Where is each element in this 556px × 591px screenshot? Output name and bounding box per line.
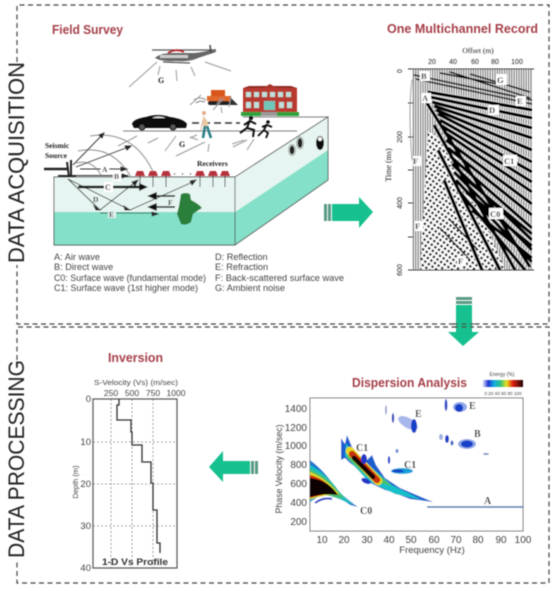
wave labels on dispersion bbox=[356, 401, 492, 517]
legend: left column: C0: Surface wave (fundamental mode) bbox=[54, 273, 206, 283]
legend: energy colour scale: Energy (%) bbox=[489, 372, 515, 378]
title: inversion: Inversion bbox=[108, 351, 163, 365]
y tick labels: 400 bbox=[290, 498, 307, 509]
wave labels: B bbox=[114, 172, 119, 181]
C1 higher mode energy bbox=[341, 435, 433, 502]
velocity step line bbox=[117, 399, 160, 553]
wave labels on record bbox=[413, 71, 526, 266]
y tick labels: 20 bbox=[80, 479, 91, 490]
ray arrows bbox=[73, 133, 131, 178]
noise lines: ground bbox=[118, 95, 254, 156]
legend: left column: C1: Surface wave (1st higher mode) bbox=[54, 283, 198, 293]
icon: school building bbox=[241, 84, 299, 116]
wave fronts bbox=[76, 135, 155, 177]
title: field survey: Field Survey bbox=[52, 23, 123, 37]
y tick labels bbox=[80, 394, 91, 574]
chart label: 1-D Vs Profile bbox=[102, 557, 168, 568]
wave labels: A bbox=[102, 165, 108, 174]
x tick labels: 250 bbox=[104, 388, 118, 398]
y tick labels: 1000 bbox=[285, 441, 307, 452]
wave labels on dispersion: A bbox=[484, 496, 492, 507]
road centre line bbox=[192, 122, 240, 124]
arrow: left bbox=[209, 451, 258, 482]
time tick labels bbox=[397, 69, 404, 276]
heading: data processing: DATA PROCESSING bbox=[4, 360, 29, 558]
legend: energy colour scale: 0 20 40 60 80 100 bbox=[484, 391, 522, 396]
x tick labels: 80 bbox=[472, 535, 484, 546]
wave labels on dispersion: C1 bbox=[404, 460, 416, 471]
time tick labels: 0 bbox=[397, 69, 404, 73]
wave labels on record: B bbox=[421, 71, 427, 81]
y tick labels: 40 bbox=[80, 563, 91, 574]
arrow: surface wave C bbox=[78, 183, 148, 191]
legend: energy colour scale bbox=[482, 372, 523, 396]
y tick labels: 1400 bbox=[285, 404, 307, 415]
arrow: right bbox=[324, 197, 373, 228]
legend: right column: G: Ambient noise bbox=[215, 283, 285, 293]
x tick labels bbox=[316, 535, 532, 546]
E energy patches bbox=[385, 399, 467, 433]
x tick labels: 40 bbox=[383, 535, 395, 546]
axis title: time: Time (ms) bbox=[384, 148, 393, 182]
axis title: offset: Offset (m) bbox=[462, 46, 494, 55]
C1 second patch bbox=[388, 449, 413, 474]
text: seismic source: Source bbox=[45, 151, 68, 160]
wave labels on dispersion: C0 bbox=[360, 506, 372, 517]
offset tick labels: 40 bbox=[449, 59, 457, 66]
wave labels on dispersion: E bbox=[469, 401, 476, 412]
x axis title: S-Velocity (Vs) (m/sec) bbox=[94, 378, 179, 387]
icon: bulldozer bbox=[194, 90, 238, 105]
text: seismic source: Seismic bbox=[45, 141, 70, 150]
x tick labels: 60 bbox=[428, 535, 440, 546]
panel: field survey diagram bbox=[44, 45, 328, 245]
wave labels bbox=[93, 164, 173, 219]
wave labels on record: G bbox=[497, 75, 504, 85]
A air wave energy bbox=[427, 506, 523, 508]
wave labels on record: F bbox=[413, 156, 418, 166]
divider dashes over arrow bbox=[453, 324, 474, 327]
frame: data acquisition bbox=[17, 5, 549, 324]
x tick labels: 1000 bbox=[167, 388, 186, 398]
legend: right column: D: Reflection bbox=[215, 252, 268, 262]
y tick labels: 1200 bbox=[285, 423, 307, 434]
icon: seismic source hammer bbox=[44, 160, 76, 177]
x tick labels: 50 bbox=[405, 535, 417, 546]
time tick labels: 400 bbox=[397, 197, 404, 209]
seismogram wiggle traces bbox=[408, 69, 534, 270]
wave labels on record: D bbox=[489, 105, 495, 115]
C0 fundamental mode energy bbox=[310, 460, 358, 507]
legend: right column bbox=[215, 252, 344, 293]
chart: multichannel seismic record bbox=[384, 46, 534, 276]
noise lines: helicopter bbox=[129, 62, 231, 87]
icon: runners bbox=[240, 116, 272, 138]
x tick labels bbox=[104, 388, 186, 398]
B energy patches bbox=[439, 434, 489, 455]
y tick labels bbox=[285, 404, 307, 528]
legend: left column: A: Air wave bbox=[54, 252, 100, 262]
wave labels on record: F bbox=[415, 221, 420, 231]
wave labels on dispersion: B bbox=[474, 429, 481, 440]
legend: left column bbox=[54, 252, 206, 293]
offset tick labels: 20 bbox=[428, 59, 436, 66]
offset tick labels: 100 bbox=[511, 59, 523, 66]
wave labels on record: C0 bbox=[490, 209, 500, 219]
wave labels on record: E bbox=[517, 96, 523, 106]
icon: helicopter bbox=[152, 45, 216, 63]
title: dispersion analysis: Dispersion Analysis bbox=[352, 376, 467, 390]
icon: green inclusion bbox=[177, 193, 202, 225]
frame: data processing bbox=[17, 327, 549, 583]
arrow: down bbox=[448, 297, 479, 346]
title: one multichannel record: One Multichannel Record bbox=[387, 22, 538, 36]
wave labels: D bbox=[93, 195, 99, 204]
block model bbox=[54, 117, 328, 245]
icon: walking person bbox=[201, 111, 211, 138]
y axis title: Depth (m) bbox=[71, 465, 80, 499]
ray paths: reflection and refraction bbox=[68, 179, 196, 216]
wave labels on dispersion: E bbox=[415, 409, 422, 420]
wave labels: E bbox=[109, 210, 114, 219]
time tick labels: 600 bbox=[397, 264, 404, 276]
y tick labels: 0 bbox=[86, 394, 91, 405]
y axis title: Phase Velocity (m/sec) bbox=[274, 424, 285, 514]
y tick labels: 30 bbox=[80, 521, 91, 532]
plot frame and grid bbox=[93, 399, 177, 568]
x tick labels: 70 bbox=[450, 535, 462, 546]
arrows: back-scattered F bbox=[149, 193, 175, 210]
y tick labels: 200 bbox=[290, 517, 307, 528]
label: G top: G bbox=[158, 76, 164, 85]
x axis title: Frequency (Hz) bbox=[399, 545, 465, 556]
chart: dispersion image bbox=[274, 398, 532, 556]
legend: right column: F: Back-scattered surface wave bbox=[215, 273, 344, 283]
heading: data acquisition: DATA ACQUISITION bbox=[4, 62, 29, 263]
legend: left column: B: Direct wave bbox=[54, 262, 113, 272]
y tick labels: 10 bbox=[80, 437, 91, 448]
offset tick labels: 80 bbox=[491, 59, 499, 66]
x tick labels: 30 bbox=[361, 535, 373, 546]
offset tick labels bbox=[428, 59, 523, 66]
wave labels on record: C1 bbox=[504, 156, 514, 166]
receivers bbox=[135, 171, 230, 187]
plot frame bbox=[310, 398, 523, 531]
wave labels: C bbox=[105, 183, 111, 192]
x tick labels: 90 bbox=[495, 535, 507, 546]
y tick labels: 600 bbox=[290, 479, 307, 490]
x tick labels: 20 bbox=[338, 535, 350, 546]
x tick labels: 100 bbox=[515, 535, 532, 546]
x tick labels: 750 bbox=[146, 388, 160, 398]
offset tick labels: 60 bbox=[471, 59, 479, 66]
chart: 1-D Vs profile bbox=[71, 378, 186, 574]
x tick labels: 10 bbox=[316, 535, 328, 546]
time tick labels: 200 bbox=[397, 131, 404, 143]
wave labels on dispersion: C1 bbox=[356, 443, 368, 454]
wave labels on record: F bbox=[458, 256, 463, 266]
y tick labels: 800 bbox=[290, 460, 307, 471]
wave labels on record: A bbox=[422, 93, 429, 103]
wave labels: F bbox=[168, 198, 173, 207]
label: G ground: G bbox=[179, 140, 185, 149]
x tick labels: 500 bbox=[125, 388, 139, 398]
legend: right column: E: Refraction bbox=[215, 262, 268, 272]
label: receivers: Receivers bbox=[197, 159, 228, 168]
icon: car bbox=[132, 115, 187, 130]
